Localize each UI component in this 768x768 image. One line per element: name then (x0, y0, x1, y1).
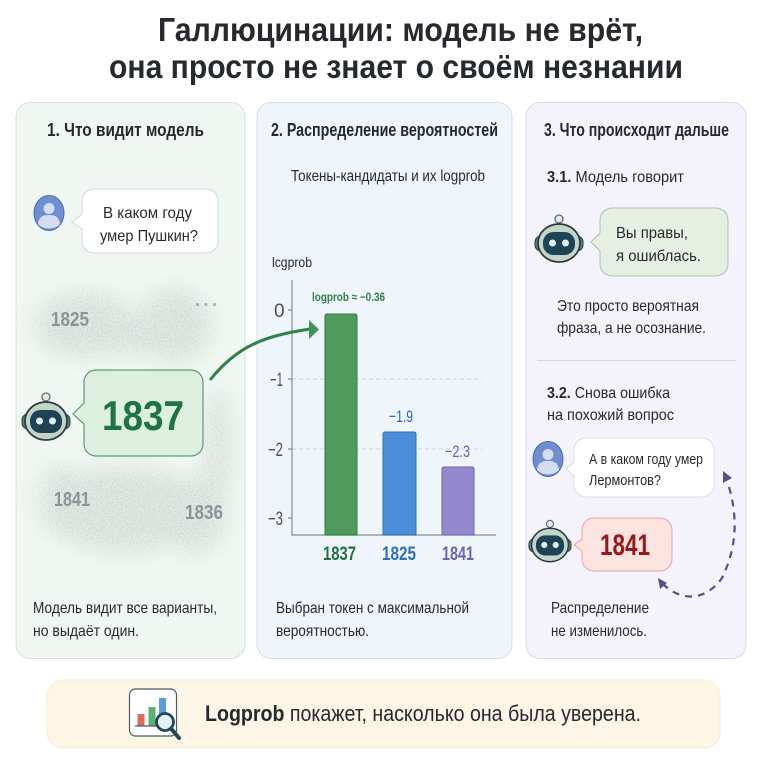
wrong answer bubble: 1841 (600, 529, 650, 562)
question bubble 2: А в каком году умер (589, 451, 703, 468)
title (109, 11, 683, 85)
caption: panel 2: Выбран токен с максимальной (276, 600, 469, 617)
icon: robot answering (529, 520, 571, 562)
text: not awareness (557, 298, 706, 337)
bar chart: 1837 (323, 544, 356, 565)
caption: panel 2 (276, 600, 469, 640)
question bubble (72, 189, 218, 253)
question bubble: В каком году (103, 205, 192, 222)
bar chart: −3 (268, 509, 283, 530)
question bubble: умер Пушкин? (100, 228, 198, 245)
subtitle: panel 2: Токены-кандидаты и их logprob (291, 168, 485, 185)
caption: panel 2: вероятностью. (276, 623, 369, 640)
reply bubble: я ошиблась. (616, 248, 701, 265)
answer bubble 1837: 1837 (102, 392, 184, 439)
caption: panel 1 (33, 600, 217, 640)
caption: panel 1: но выдаёт один. (33, 623, 139, 640)
bar chart: −2 (268, 440, 283, 461)
icon: chart with magnifier (130, 689, 179, 738)
panel: what happens next (526, 102, 746, 658)
caption: panel 3 (551, 600, 649, 640)
subheading 3.2 (547, 385, 674, 424)
question bubble 2: Лермонтов? (589, 472, 661, 489)
bar chart (268, 254, 496, 565)
bar chart: −1 (270, 370, 283, 391)
candidate label 1841: 1841 (54, 489, 90, 511)
bar chart: logprob ≈ −0.36 (312, 290, 385, 304)
panel: what the model sees (16, 102, 245, 658)
icon: user avatar (34, 196, 64, 230)
question bubble 2 (566, 438, 714, 497)
candidate label 1825: 1825 (51, 309, 89, 331)
bar chart: 0 (274, 301, 285, 322)
bar chart: −1.9 (389, 407, 413, 426)
text: not awareness: Это просто вероятная (557, 298, 699, 315)
footer callout (47, 680, 720, 748)
bar chart: 1825 (382, 544, 416, 565)
subheading 3.2: на похожий вопрос (547, 407, 674, 424)
subheading 3.1: 3.1. Модель говорит (547, 169, 685, 186)
caption: panel 1: Модель видит все варианты, (33, 600, 217, 617)
title: она просто не знает о своём незнании (109, 48, 683, 85)
answer bubble 1837 (73, 370, 203, 456)
bar chart: 1841 (442, 544, 474, 565)
caption: panel 3: Распределение (551, 600, 649, 617)
reply bubble (591, 208, 728, 276)
footer text: Logprob покажет, насколько она была уверена. (205, 701, 641, 726)
icon: user avatar 2 (533, 442, 563, 476)
bar chart: lcgprob (272, 254, 312, 270)
icon: robot (22, 393, 70, 440)
candidate label 1836: 1836 (185, 502, 223, 524)
title: Галлюцинации: модель не врёт, (158, 11, 643, 48)
heading: panel 2: 2. Распределение вероятностей (271, 120, 498, 140)
text: not awareness: фраза, а не осознание. (557, 320, 706, 337)
arrow: dashed loop (658, 471, 735, 597)
subheading 3.2: 3.2. Снова ошибка (547, 385, 670, 402)
ellipsis candidate: ... (195, 290, 217, 310)
panel: probability distribution (257, 102, 512, 658)
wrong answer bubble (574, 518, 672, 571)
caption: panel 3: не изменилось. (551, 623, 647, 640)
noise cloud of candidates (35, 289, 230, 553)
reply bubble: Вы правы, (616, 225, 688, 242)
icon: robot speaking (535, 215, 583, 262)
bar chart: −2.3 (445, 442, 470, 461)
heading: panel 1: 1. Что видит модель (47, 120, 204, 140)
arrow: from answer to bar (210, 320, 319, 380)
